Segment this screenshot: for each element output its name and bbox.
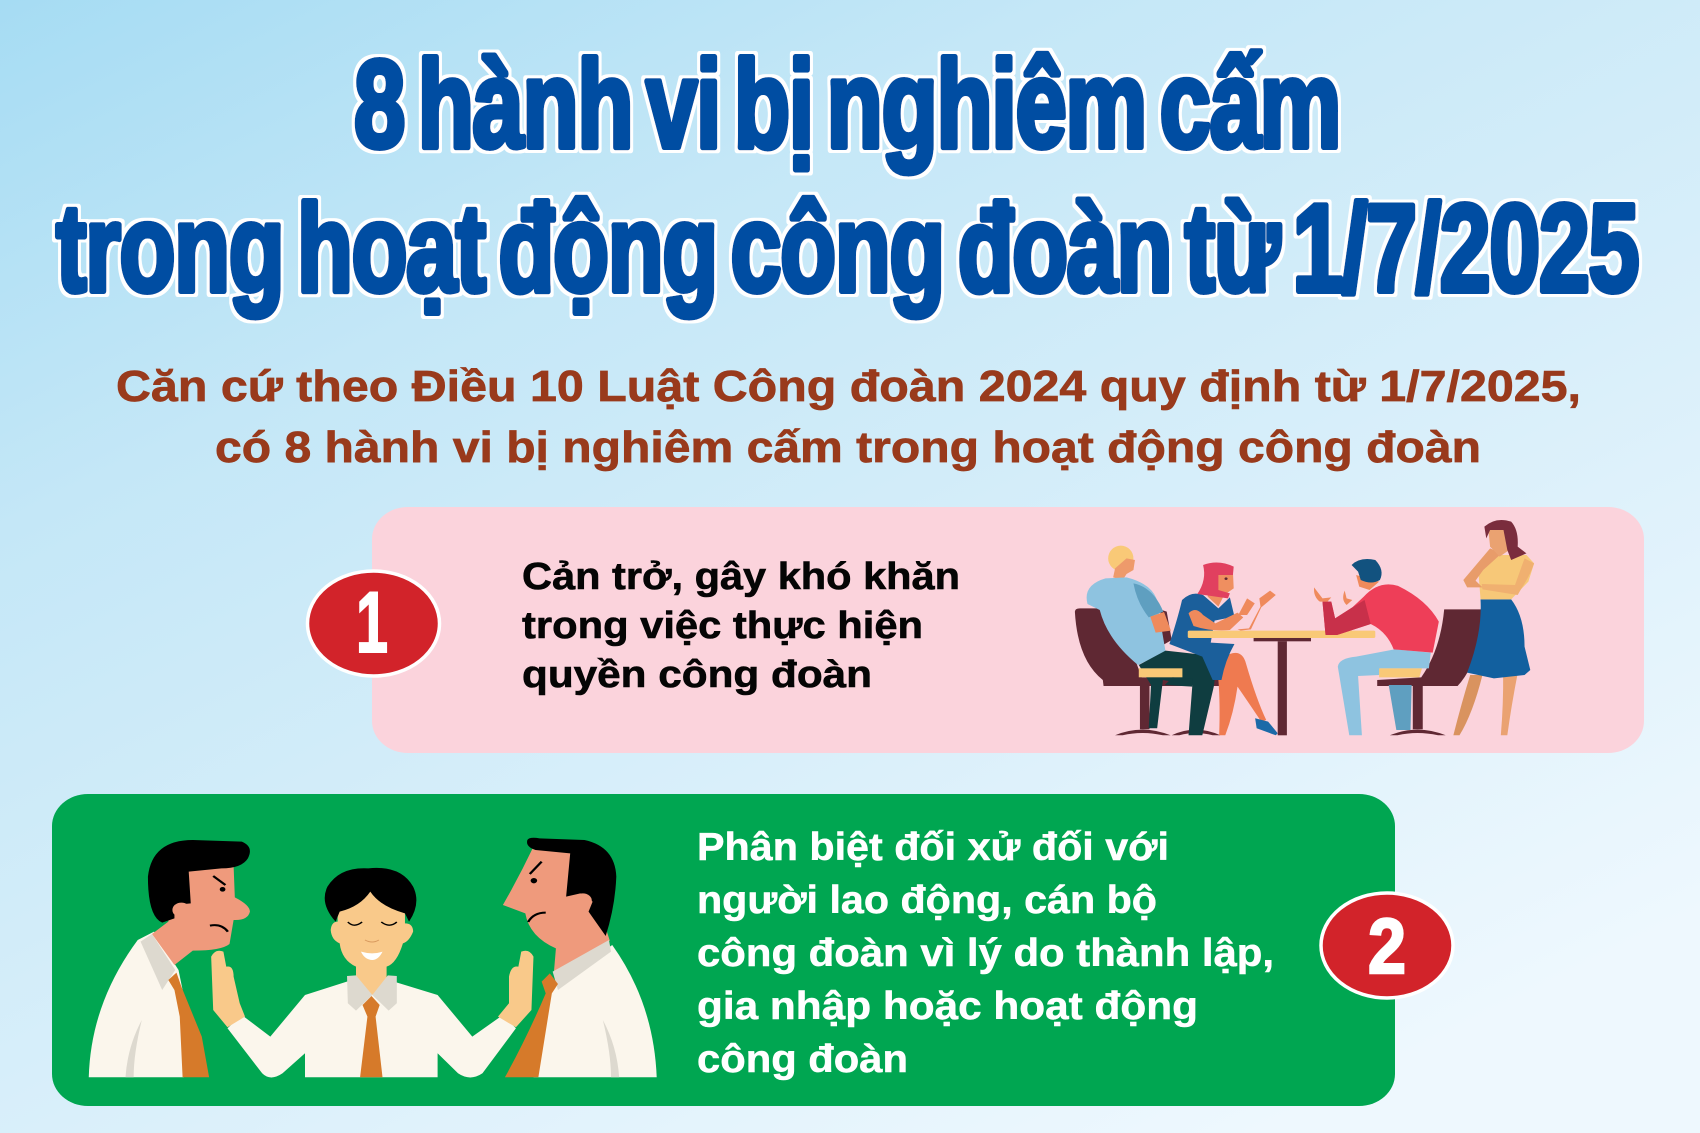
standing woman [1453, 520, 1534, 735]
subtitle: có 8 hành vi bị nghiêm cấm trong hoạt động công đoàn [215, 423, 1481, 472]
number badge 1 [308, 571, 440, 676]
item 2 text: công đoàn [697, 1038, 908, 1081]
item 1 text [522, 556, 960, 696]
number badge 2: 2 [1368, 902, 1406, 990]
number badge 1: 1 [356, 575, 388, 671]
right angry man [503, 838, 657, 1077]
right chair [1377, 609, 1486, 735]
green card [52, 794, 1395, 1106]
illustration: people arguing at a table [1075, 520, 1534, 735]
item 1 text: Cản trở, gây khó khăn [522, 556, 960, 598]
item 2 text: người lao động, cán bộ [697, 879, 1157, 922]
number badge 2 [1321, 893, 1453, 998]
panel: item 2 [52, 794, 1453, 1106]
leaning man [1314, 559, 1439, 735]
pink card [372, 507, 1644, 753]
item 2 text: công đoàn vì lý do thành lập, [697, 932, 1274, 975]
item 1 text: trong việc thực hiện [522, 605, 923, 647]
seated woman [1169, 563, 1278, 735]
item 1 text: quyền công đoàn [522, 654, 872, 696]
left chair [1075, 608, 1227, 735]
centre calm man [211, 868, 533, 1077]
item 2 text [697, 826, 1274, 1081]
left angry man [89, 840, 250, 1077]
seated man [1087, 546, 1215, 735]
subtitle: Căn cứ theo Điều 10 Luật Công đoàn 2024 quy định từ 1/7/2025, [116, 362, 1581, 411]
title [56, 36, 1638, 318]
table [1188, 631, 1375, 735]
subtitle [116, 362, 1581, 472]
panel: item 1 [308, 507, 1644, 753]
illustration: three men in an argument [89, 838, 657, 1077]
title: 8 hành vi bị nghiêm cấm [354, 36, 1340, 174]
item 2 text: Phân biệt đối xử đối với [697, 826, 1169, 869]
item 2 text: gia nhập hoặc hoạt động [697, 985, 1198, 1028]
